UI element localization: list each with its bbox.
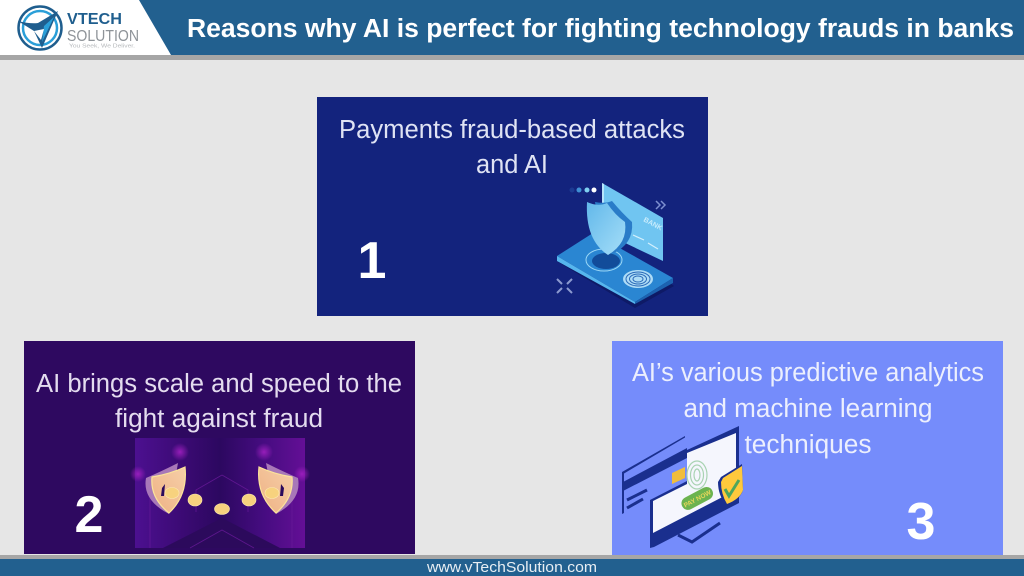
panel 2 heading: AI brings scale and speed to the: [36, 370, 402, 398]
button label: PAY NOW: [683, 489, 713, 509]
header bar: [0, 0, 1024, 60]
card label: BANK: [642, 217, 663, 232]
panel 2: scale and speed: [24, 341, 415, 554]
icon: logo emblem: [18, 6, 62, 50]
coins: [165, 488, 279, 514]
footer bar: [0, 555, 1024, 576]
icon: monitor with card, fingerprint and shield: [622, 426, 743, 548]
logo subtitle: SOLUTION: [67, 28, 139, 45]
panel 1 number: 1: [358, 232, 386, 290]
logo: VTech Solution: [18, 6, 139, 50]
panel 3 heading: AI’s various predictive analytics: [632, 359, 984, 387]
right shield: [266, 463, 299, 514]
title: Reasons why AI is perfect for fighting technology frauds in banks: [187, 15, 1014, 43]
panel 2 heading: [36, 370, 402, 433]
panel 2 number: 2: [75, 486, 103, 544]
icon: phone with shield and bank card: [557, 183, 674, 308]
logo wordmark: VTECH: [67, 11, 122, 28]
panel 3: predictive analytics: [612, 341, 1003, 555]
panel 3 number: 3: [907, 493, 935, 551]
panel 1 heading: [339, 116, 685, 179]
panel 1: payments fraud: [317, 97, 708, 316]
logo tagline: You Seek, We Deliver.: [69, 44, 136, 50]
image: shields and coins: [130, 438, 310, 548]
panel 3 heading: and machine learning: [684, 395, 932, 423]
panel 1 heading: and AI: [476, 151, 548, 179]
panel 1 heading: Payments fraud-based attacks: [339, 116, 685, 144]
panel 3 heading: [632, 359, 984, 459]
footer url: www.vTechSolution.com: [426, 559, 597, 576]
panel 2 heading: fight against fraud: [115, 405, 323, 433]
left shield: [145, 463, 178, 514]
panel 3 heading: techniques: [744, 431, 872, 459]
